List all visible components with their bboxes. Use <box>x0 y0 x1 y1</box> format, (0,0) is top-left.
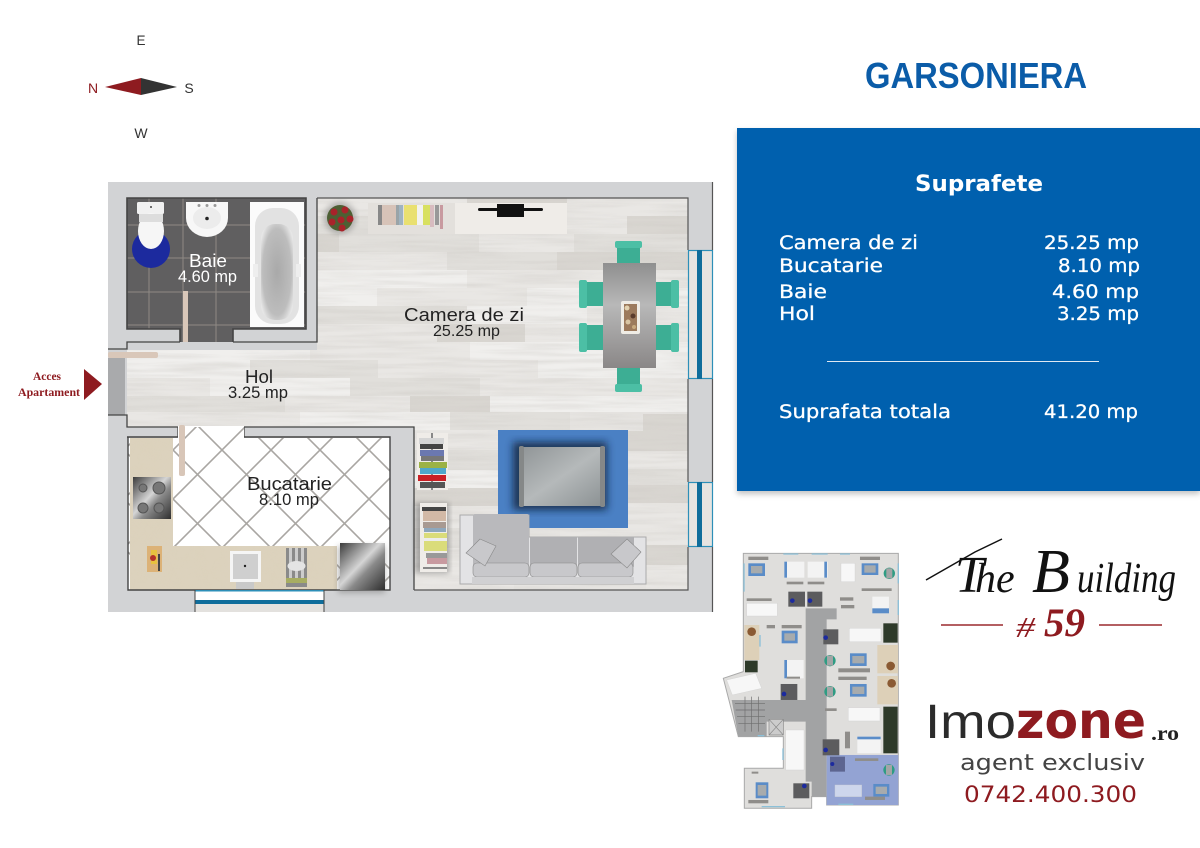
label: bathroom: Baie <box>189 251 227 271</box>
compass: W <box>134 125 148 141</box>
icon: plant <box>324 202 356 234</box>
small furniture <box>747 557 892 803</box>
label: hall <box>228 367 288 402</box>
planters <box>745 623 898 753</box>
areas table: 8.10 mp <box>1058 256 1140 277</box>
icon: fridge <box>338 543 385 593</box>
agent text: agent exclusiv <box>960 751 1145 776</box>
label: bathroom: 4.60 mp <box>178 268 237 286</box>
stairs <box>735 697 765 732</box>
panel heading: Suprafete <box>915 172 1043 197</box>
title: GARSONIERA <box>865 55 1087 96</box>
compass <box>88 33 194 141</box>
areas table: 3.25 mp <box>1057 304 1139 325</box>
compass: E <box>136 33 146 48</box>
icon: kitchen sink <box>230 551 261 589</box>
icon: dish rack <box>286 548 307 587</box>
icon: shoe rack <box>417 433 448 490</box>
logo: The Building #59: uilding <box>1077 556 1176 602</box>
icon: bathtub <box>250 202 304 327</box>
areas table: Hol <box>779 304 815 325</box>
areas table: 4.60 mp <box>1052 282 1139 303</box>
access label: Acces <box>33 369 61 383</box>
coffee table <box>513 442 607 510</box>
chairs <box>579 241 679 392</box>
room: kitchen <box>127 425 390 593</box>
window: living room upper <box>688 250 713 379</box>
elevator <box>769 719 783 735</box>
corridor <box>732 608 837 797</box>
wood floor: living room and hall <box>120 190 700 600</box>
phone number: 0742.400.300 <box>964 783 1137 808</box>
label: living room: Camera de zi <box>404 305 524 325</box>
room: bathroom floor <box>127 198 306 342</box>
panel: suprafete <box>737 128 1200 494</box>
rug <box>498 430 628 528</box>
terraces <box>744 625 898 704</box>
icon: books shelf <box>415 503 449 573</box>
window: kitchen <box>195 590 324 612</box>
label: hall: Hol <box>245 367 273 387</box>
areas table: Bucatarie <box>779 256 883 277</box>
access label <box>18 369 102 400</box>
offices <box>784 562 889 753</box>
dining table set <box>579 241 679 392</box>
areas table: 25.25 mp <box>1044 233 1139 254</box>
icon: cutting board <box>147 546 162 572</box>
logo: The Building #59: 59 <box>1044 600 1085 645</box>
icon: tv stand <box>455 203 567 234</box>
building key plan <box>723 553 898 808</box>
icon: toilet <box>137 202 164 249</box>
logo: The Building #59 <box>926 538 1176 645</box>
areas table: Camera de zi <box>779 233 918 254</box>
floor plan <box>108 182 713 612</box>
label: kitchen: Bucatarie <box>247 474 332 494</box>
label: kitchen: 8.10 mp <box>259 491 319 509</box>
label: living room: 25.25 mp <box>433 323 500 340</box>
dining sets <box>824 568 895 776</box>
access label: Apartament <box>18 385 80 399</box>
logo: Imozone: .ro <box>1151 723 1179 745</box>
logo: The Building #59: T <box>955 547 987 604</box>
icon: washbasin <box>186 202 228 237</box>
icon: stove <box>133 477 171 519</box>
door: kitchen <box>179 425 185 476</box>
window: living room lower <box>688 482 713 547</box>
logo: Imozone: zone <box>1016 692 1146 750</box>
sofa <box>460 514 646 584</box>
logo: The Building #59: B <box>1032 538 1070 606</box>
areas table: Suprafata totala <box>779 402 951 423</box>
label: hall: 3.25 mp <box>228 384 288 402</box>
logo: Imozone: Imo <box>925 696 1016 749</box>
kitchens <box>727 563 881 797</box>
label: bathroom <box>178 251 237 286</box>
bathrooms <box>781 592 845 798</box>
selected apartment <box>827 755 898 805</box>
windows <box>744 554 898 807</box>
label: kitchen <box>247 474 332 509</box>
areas table: 41.20 mp <box>1044 402 1138 423</box>
areas table <box>779 233 1140 423</box>
compass: N <box>88 80 98 96</box>
logo: The Building #59: he <box>975 556 1025 602</box>
areas table: Baie <box>779 282 827 303</box>
logo: Imozone <box>925 692 1179 750</box>
icon: tray <box>621 301 640 334</box>
icon: bath mat <box>132 230 170 268</box>
logo: The Building #59: # <box>1016 613 1036 644</box>
icon: bookshelf <box>368 203 455 234</box>
door: bathroom <box>183 291 188 342</box>
door: entrance <box>108 198 414 590</box>
label: living room <box>404 305 524 340</box>
compass: S <box>184 80 194 96</box>
